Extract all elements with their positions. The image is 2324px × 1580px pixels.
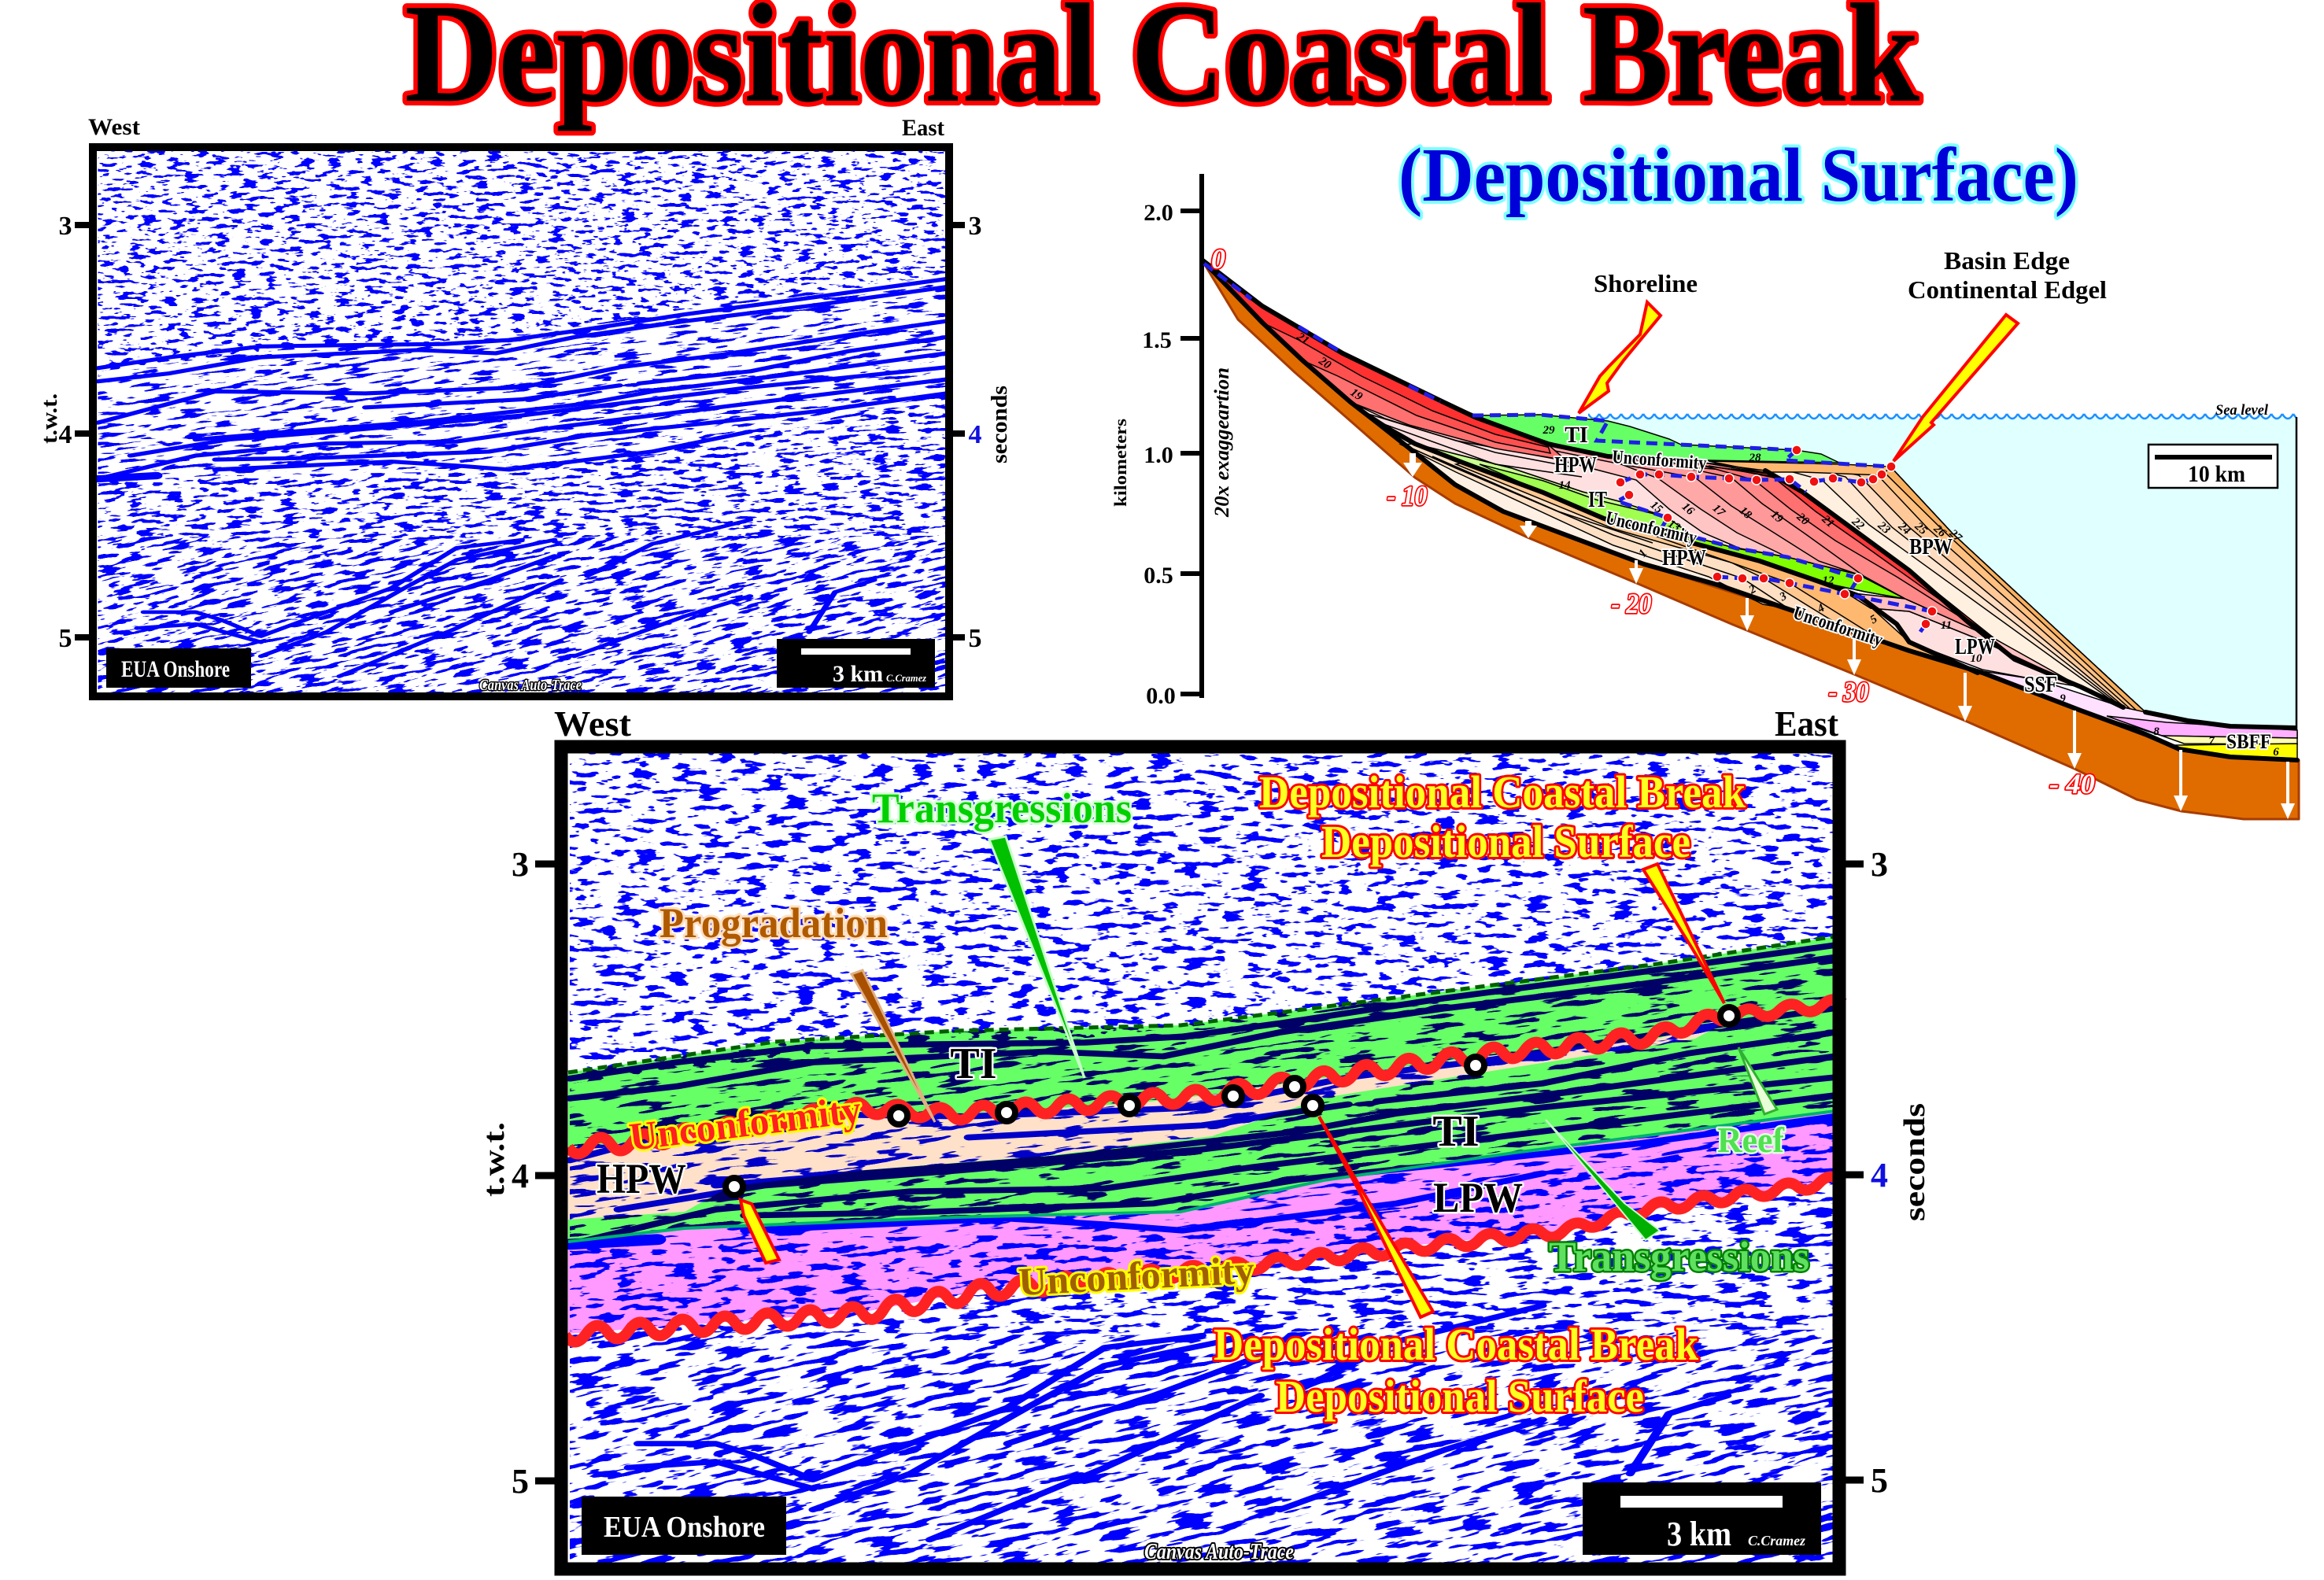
layer numbers: 29 [1543,424,1555,437]
upper highstand and clinoforms 15-21 [1350,402,1995,639]
coastal break label lower [1214,1319,1699,1422]
lower unconformity wavy line [565,1176,1840,1342]
layer numbers: 24 [1895,519,1913,537]
basin edge label [1908,246,2107,304]
time axis top: seconds [988,386,1012,463]
layer numbers: 2 [1746,582,1759,597]
top of transgressive interval dashed [568,936,1835,1072]
systems tract labels: TI [1565,423,1588,448]
time axis top: 5 [58,624,72,653]
time axis top: 4 [968,420,982,449]
layer numbers: 8 [2153,725,2160,738]
time axis top: t.w.t. [38,393,62,444]
depth labels [1211,243,2095,799]
green transgressive intervals [568,936,1835,1242]
transgressions label bottom: Transgressions [1549,1233,1809,1280]
interval labels: LPW [1433,1174,1523,1221]
systems tract labels: Unconformity [1612,447,1707,474]
direction labels top: East [902,115,944,141]
shoreline arrow [1579,302,1661,413]
layer numbers: 19 [1348,386,1365,404]
panel: interpreted seismic line [478,703,1931,1569]
location box top: EUA Onshore [121,656,230,682]
scale bar main [1583,1482,1821,1555]
panel frame main [561,747,1839,1569]
time axis top: 3 [58,212,72,241]
transgressions arrow bottom [1546,1120,1660,1240]
direction labels top [88,114,944,141]
direction labels main: West [554,703,632,744]
layer numbers: 14 [1558,479,1571,492]
layer numbers: 6 [2273,746,2279,759]
layer numbers: 20 [1794,510,1812,528]
interval labels: TI [1432,1107,1480,1156]
upper unconformity label: Unconformity [627,1087,863,1159]
settling arrows [1403,453,2295,819]
coastal break label upper: Depositional Coastal Break [1259,766,1746,818]
depth labels: - 10 [1387,480,1428,511]
coastal break label upper [1259,766,1746,867]
panel: top seismic line [38,114,1012,696]
coastal break label upper: Depositional Surface [1321,816,1690,867]
basin-edge clinoforms 22-27 [1709,461,2145,712]
vertical axis: 0.5 [1144,563,1173,589]
beige highstand prograding wedge [568,1017,1729,1220]
transgressions arrow top [989,836,1084,1078]
scale bar top [777,639,935,688]
panel: geological section [1110,174,2299,819]
shelf transgressive wedge TI [1472,415,1839,463]
layer numbers: 9 [2060,692,2066,705]
systems tract labels: Unconformity [1790,603,1885,651]
coastal break dots [1616,445,1937,629]
upper unconformity wavy line [568,999,1843,1154]
panel frame top [93,147,949,696]
substrate layer [1202,260,2299,819]
direction labels main: East [1775,703,1839,744]
layer numbers: 21 [1294,330,1311,348]
time axis top: 5 [968,624,982,653]
systems tract labels: BPW [1909,535,1953,559]
basin edge label: Basin Edge [1944,246,2070,275]
layer numbers: 19 [1768,508,1786,526]
layer numbers: 5 [1868,612,1880,626]
reef arrow [1738,1047,1777,1114]
scale bar main: C.Cramez [1748,1533,1805,1549]
systems tract labels: HPW [1662,546,1706,570]
seismic image main [570,753,1834,1567]
coastal break label lower: Depositional Surface [1276,1371,1644,1422]
depth labels: - 30 [1829,676,1868,707]
pink lowstand wedge [568,1111,1835,1334]
location box top [106,648,251,688]
seismic image top [98,150,946,694]
interval labels [597,1039,1523,1221]
layer numbers: 27 [1946,526,1964,545]
depth labels: 0 [1211,243,1225,275]
arrow to lower coastal break [1319,1117,1433,1317]
lower unconformity label: Unconformity [1018,1247,1255,1304]
layer numbers: 10 [1971,652,1982,665]
direction labels main [554,703,1839,744]
layer numbers: 7 [2208,735,2215,748]
systems tract labels: SSF [2024,673,2057,697]
vertical axis: 0.0 [1146,683,1176,709]
sea water [1588,417,2296,744]
systems tract labels: SBFF [2226,730,2271,753]
direction labels top: West [88,114,140,140]
depth labels: - 20 [1612,588,1651,619]
depth labels: - 40 [2049,768,2095,799]
dashed depositional surfaces [1204,264,1932,632]
vertical axis [1110,174,1233,709]
systems tract labels: IT [1588,488,1607,512]
coastal break markers [726,1007,1738,1195]
sea level label: Sea level [2215,402,2269,419]
progradation arrow [852,970,935,1122]
interval labels: TI [950,1039,997,1088]
layer numbers: 13 [1666,518,1683,534]
scale bar top: 3 km [833,661,883,687]
location box main: EUA Onshore [604,1511,765,1544]
layer numbers: 17 [1710,502,1727,519]
vertical axis: 1.5 [1142,327,1172,353]
basin edge arrow [1894,315,2018,461]
sea surface waves [1588,412,2296,422]
time axis main: t.w.t. [478,1122,511,1197]
layer numbers: 11 [1941,619,1952,632]
time axis main: 3 [512,845,529,884]
systems tract labels: Unconformity [1604,508,1698,548]
vertical axis: 2.0 [1144,200,1173,226]
shoreline label: Shoreline [1594,269,1698,297]
interval labels: HPW [597,1155,686,1202]
layer numbers: 21 [1819,512,1837,530]
time axis main: 3 [1871,845,1888,884]
layer numbers: 4 [1815,601,1827,616]
credit main: Canvas Auto-Trace [1144,1540,1294,1564]
transgressive green layers 12-14 [1419,444,1905,599]
time axis main: 5 [1871,1461,1888,1500]
subtitle: (Depositional Surface) [1398,133,2078,218]
layer numbers: 3 [1777,589,1790,604]
layer numbers: 15 [1648,499,1665,516]
time axis top [38,212,1012,653]
scale box 10 km [2148,445,2278,488]
small arrow to coastal break at HPW [741,1200,779,1263]
layer numbers: 25 [1912,519,1930,537]
coastal break label lower: Depositional Coastal Break [1214,1319,1699,1370]
right boundary of section [2296,417,2297,748]
systems tract labels [1554,423,2271,753]
location box main [582,1497,786,1555]
time axis top: 4 [58,420,72,449]
systems tract labels: HPW [1554,453,1597,478]
scale bar main: 3 km [1667,1515,1731,1553]
time axis main: 4 [1871,1156,1888,1194]
left red layers 19-21 [1202,260,1582,477]
layer numbers: 23 [1875,519,1893,537]
vertical axis: 1.0 [1144,442,1173,468]
layer numbers: 20 [1316,354,1333,372]
time axis main: 4 [512,1157,529,1195]
basin edge label: Continental Edgel [1908,275,2107,304]
scale bar top: C.Cramez [886,672,927,684]
time axis main [478,845,1931,1501]
layer numbers: 18 [1737,504,1754,522]
layer numbers: 16 [1679,500,1697,518]
lower highstand layers 1-5 [1375,421,1978,673]
layer numbers: 1 [1636,547,1650,559]
credit top: Canvas Auto-Trace [479,677,582,694]
vertical axis: kilometers [1110,419,1130,507]
thick sequence boundaries [1202,260,2297,760]
layer numbers [1294,330,2279,759]
green base edge line [568,1015,1835,1242]
transgressions label top: Transgressions [872,784,1132,832]
layer numbers: 22 [1849,515,1867,533]
toe layers 6-9 [1982,671,2297,759]
layer numbers: 12 [1823,574,1834,587]
reef label: Reef [1717,1120,1785,1160]
lowstand layers 10-11 [1846,592,2081,687]
scale box 10 km: 10 km [2188,461,2245,487]
vertical axis: 20x exaggeartion [1210,367,1233,518]
time axis main: seconds [1898,1103,1931,1221]
progradation label: Progradation [660,899,888,947]
arrow to upper coastal break [1643,864,1724,1003]
layer numbers: 28 [1749,452,1761,464]
time axis main: 5 [512,1462,529,1501]
systems tract labels: LPW [1955,635,1995,659]
time axis top: 3 [968,212,982,241]
layer numbers: 26 [1931,522,1949,540]
